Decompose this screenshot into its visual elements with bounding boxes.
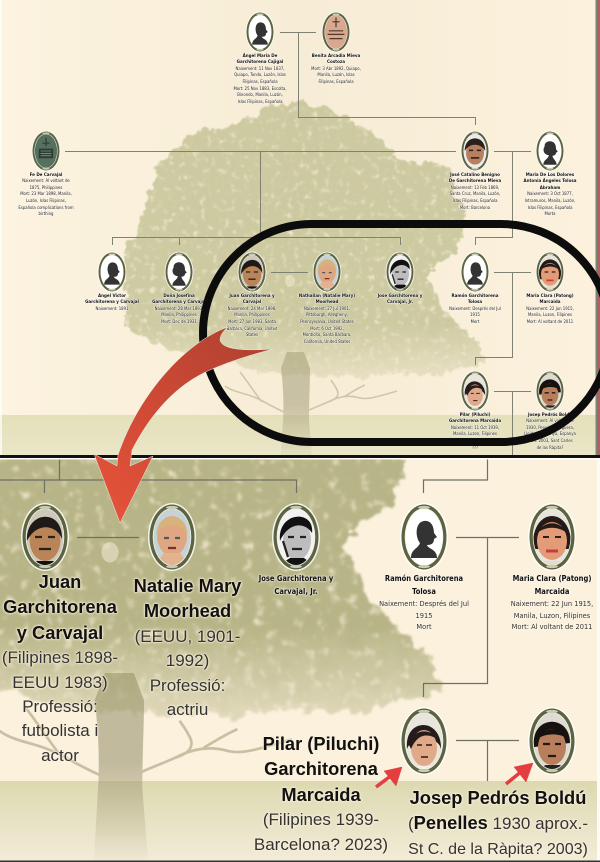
- text: Josep Pedrós Boldú: Josep Pedrós Boldú: [410, 787, 586, 808]
- text: Àngel Maria: Ángel Maria De: [243, 54, 277, 59]
- portrait: Maria Clara large: [528, 503, 576, 571]
- text: Ramón Garchitorena Tolosa: [379, 574, 469, 631]
- text: Nathalie small: Pittsburgh, Allegheny,: [306, 313, 348, 318]
- text: Juan small: Manila, Philippines: [234, 313, 270, 318]
- text: Josep Pedrós Boldú: [408, 787, 588, 858]
- text: José Catalino: De Garchitorena Mieva: [449, 179, 501, 184]
- text: Jose Jr small: Jose Garchitorena y: [378, 294, 422, 299]
- text: Ramón small: [449, 293, 501, 325]
- portrait: Juan small: [238, 252, 266, 292]
- portrait: Natalie Moorhead large: [148, 503, 196, 571]
- portrait: Pilar small: [461, 371, 489, 411]
- text: Maria Clara Marcaida: Maria Clara (Patong): [513, 574, 591, 583]
- text: Pilar Garchitorena Marcaida: Garchitorena: [264, 758, 378, 779]
- text: Josefina: [152, 292, 206, 325]
- text: Maria Clara Marcaida: Naixement: 22 Jun 1915,: [511, 599, 593, 608]
- text: Juan small: Barbara, California, United: [227, 327, 277, 332]
- text: Josep small: Naixement: Al voltant de: [526, 419, 574, 424]
- text: Pilar Garchitorena Marcaida: Pilar (Piluchi): [263, 733, 379, 754]
- text: Ramón small: Tolosa: [468, 300, 482, 305]
- text: Benita Arcadia: [311, 53, 361, 85]
- portrait: Jose Jr small: [386, 252, 414, 292]
- portrait: Fe seal: [32, 131, 60, 171]
- text: Josep small: de las Ràpita?: [537, 446, 563, 451]
- text: Nathalie small: Nathalian (Natalie Mary): [299, 294, 355, 299]
- text: Àngel Maria: Quiapo, Tondo, Luzón, Islas: [234, 73, 286, 78]
- portrait: Josep small: [536, 371, 564, 411]
- text: Juan small: Naixement: 24 Mar 1898,: [228, 307, 276, 312]
- text: Benita Arcadia: Filipinas, Española: [318, 80, 354, 85]
- family tree connector lines, bottom: [0, 459, 519, 781]
- text: Juan small: Mort: 27 Jun 1983, Santa: [228, 320, 276, 325]
- text: Fe De Carvajal: Fe De Carvajal: [30, 173, 62, 178]
- text: Maria De Los Dolores: [523, 172, 577, 217]
- text: José Catalino: Naixement: 13 Feb 1869,: [451, 186, 499, 191]
- text: Juan Garchitorena y Carvajal: Professió:: [22, 697, 98, 716]
- text: Josefina: Manila, Philippines: [161, 313, 197, 318]
- text: Nathalie small: Pennsylvania, United States: [300, 320, 354, 325]
- text: Nathalie small: Naixement: 27 Jul 1901,: [304, 307, 350, 312]
- portrait: José Catalino: [461, 131, 489, 171]
- text: Josep small: Lleida, Catalunya, Espanya: [524, 432, 576, 437]
- text: Nathalie small: Moorhead: [316, 300, 338, 305]
- text: Maria De Los Dolores: Naixement: 3 Oct 1877,: [527, 192, 573, 197]
- text: Fe De Carvajal: Española complications from: [18, 206, 74, 211]
- text: Angel Victor: [84, 293, 140, 312]
- text: Benita Arcadia: Benita Arcadia Mieva: [312, 54, 360, 59]
- portrait: Maria De Los Dolores: [536, 131, 564, 171]
- text: José Catalino: Islas Filipinas, Española: [453, 199, 497, 204]
- text: Fe De Carvajal: Luzón, Islas Filipinas,: [26, 199, 66, 204]
- text: Maria Clara small: Marcaida: [540, 300, 560, 305]
- text: Pilar small: ???: [472, 446, 478, 451]
- text: Jose Garchitorena y Carvajal Jr: [257, 574, 334, 597]
- text: Angel Victor: Naixement: 1891: [96, 307, 128, 312]
- text: Maria De Los Dolores: Abraham: [540, 186, 560, 191]
- text: Pilar small: Mort: [471, 439, 479, 444]
- text: Pilar Garchitorena Marcaida: (Filipines 1939-: [263, 810, 379, 829]
- text: Maria De Los Dolores: Islas Filipinas, Española: [528, 206, 572, 211]
- text: Fe De Carvajal: Mort: 23 Mar 1898, Manila,: [20, 192, 72, 197]
- text: Fe De Carvajal: Naixement: Al voltant de: [22, 179, 70, 184]
- text: Juan Garchitorena y Carvajal: EEUU 1983): [12, 673, 108, 692]
- text: Juan Garchitorena y Carvajal: Juan: [39, 571, 81, 592]
- text: Nathalie small: Monticito, Santa Barbara,: [303, 333, 351, 338]
- text: Ramón small: Naixement: Després del Jul: [449, 307, 501, 312]
- text: Pilar small: [448, 412, 502, 451]
- text: Maria Clara small: Mort: Al voltant de 2011: [527, 320, 573, 325]
- text: Fe De Carvajal: birthing: [39, 212, 53, 217]
- text: Ramón small: 1915: [470, 313, 480, 318]
- text: José Catalino: José Catalino Benigno: [450, 173, 500, 178]
- portrait: Pilar large: [400, 707, 448, 775]
- text: Jose Jr small: Carvajal, Jr.: [387, 300, 413, 305]
- text: Ramón Garchitorena Tolosa: Naixement: Després del Jul: [379, 599, 469, 608]
- text: Pilar small: Naixement: 11 Oct 1939,: [451, 426, 499, 431]
- text: Natalie Mary Moorhead: 1992): [166, 651, 209, 670]
- text: Natalie Mary Moorhead: actriu: [167, 700, 208, 719]
- text: Pilar Garchitorena Marcaida: Marcaida: [281, 784, 361, 805]
- text: Ramón small: Ramón Garchitorena: [452, 294, 498, 299]
- text: Natalie Mary Moorhead: (EEUU, 1901-: [135, 627, 240, 646]
- text: Natalie Mary Moorhead: Natalie Mary: [134, 575, 241, 596]
- text: Maria Clara small: [526, 293, 574, 325]
- text: Josep Pedrós Boldú: St C. de la Ràpita? 2003): [408, 841, 588, 858]
- text: Angel Victor: Garchitorena y Carvajal: [85, 300, 139, 305]
- text: Juan Garchitorena y Carvajal: (Filipines 1898-: [2, 648, 118, 667]
- text: Àngel Maria: Naixement: 11 Nov 1837,: [236, 67, 284, 72]
- text: Maria Clara small: Manila, Luzon, Filipines: [528, 313, 572, 318]
- text: Maria Clara Marcaida: Manila, Luzon, Filipines: [514, 610, 590, 620]
- text: Juan small: States: [246, 333, 258, 338]
- portrait: Àngel Maria: [246, 12, 274, 52]
- text: Josefina: Doña Josefina: [163, 294, 195, 299]
- text: Maria Clara small: Naixement: 22 Jun 1915,: [526, 307, 574, 312]
- text: José Catalino: Santa Cruz, Manila, Luzón,: [450, 192, 500, 197]
- text: Josefina: Naixement: 28 Mar 1893,: [155, 307, 203, 312]
- text: Josep Pedrós Boldú: (Penelles 1930 aprox.-: [408, 812, 588, 833]
- text: Juan small: Carvajal: [243, 300, 261, 305]
- text: Natalie Mary Moorhead: Moorhead: [144, 600, 231, 621]
- portrait: Angel Victor: [98, 252, 126, 292]
- text: Juan Garchitorena y Carvajal: [1, 571, 118, 765]
- text: Pilar small: Garchitorena Marcaida: [449, 419, 501, 424]
- text: Natalie Mary Moorhead: Professió:: [150, 676, 225, 695]
- portrait: Josep large: [528, 707, 576, 775]
- portrait: Jose Jr large: [272, 503, 320, 571]
- small red arrow: Josep: [506, 763, 533, 784]
- text: Juan small: [226, 292, 278, 338]
- bottom enlarged tree: [0, 459, 600, 860]
- overlay: highlight ring, arrows and divider: [0, 220, 600, 862]
- text: Ramón small: Mort: [471, 320, 479, 325]
- right edge strip: [0, 0, 600, 456]
- text: Josefina: Mort: Dec de 1931: [161, 320, 197, 325]
- text: Àngel Maria: Filipinas, Española: [242, 80, 278, 85]
- portrait: Maria Clara small: [536, 252, 564, 292]
- text: Nathalie small: [298, 292, 356, 345]
- text: Juan small: Juan Garchitorena y: [229, 294, 275, 299]
- text: Jose Garchitorena y Carvajal Jr: Jose Garchitorena y: [259, 574, 333, 583]
- text: Maria Clara Marcaida: Marcaida: [535, 586, 569, 596]
- family tree connector lines, top: [65, 32, 531, 456]
- text: Ramón Garchitorena Tolosa: Mort: [416, 622, 432, 631]
- panel divider: [0, 455, 600, 460]
- portrait: Nathalie small: [313, 252, 341, 292]
- small red arrow: Pilar: [376, 767, 402, 787]
- text: Pilar Garchitorena Marcaida: [254, 733, 388, 854]
- text: Ramón Garchitorena Tolosa: Tolosa: [412, 586, 436, 596]
- text: Àngel Maria: Binondo, Manila, Luzón,: [237, 93, 283, 98]
- text: Josep small: 1930, Penelles, Noguera,: [526, 426, 574, 431]
- top tree: [0, 100, 597, 470]
- text: Natalie Mary Moorhead: [132, 575, 242, 719]
- text: Juan Garchitorena y Carvajal: Garchitorena: [3, 596, 117, 617]
- text: José Catalino: Mort: Barcelona: [460, 206, 490, 211]
- bottom rule: [0, 860, 600, 862]
- text: Jose Jr small: [376, 292, 423, 305]
- text: Benita Arcadia: Costoza: [327, 60, 345, 65]
- text: Fe De Carvajal: [18, 172, 74, 217]
- text: Angel Victor: Angel Victor: [98, 294, 126, 299]
- text: Nathalie small: California, United States: [304, 340, 350, 345]
- text: Maria Clara Marcaida: Mort: Al voltant de 2011: [512, 622, 592, 631]
- text: Juan Garchitorena y Carvajal: y Carvajal: [17, 622, 103, 643]
- text: Josep small: Josep Pedrós Boldú: [528, 413, 572, 418]
- text: Maria Clara small: Maria Clara (Patong): [526, 294, 574, 299]
- portrait: Ramón small: [461, 252, 489, 292]
- text: Ramón Garchitorena Tolosa: Ramón Garchitorena: [385, 574, 463, 583]
- text: Pilar small: Manila, Luzon, Filipines: [453, 432, 497, 437]
- text: Maria De Los Dolores: Morta: [544, 212, 556, 217]
- text: Juan Garchitorena y Carvajal: futbolista i: [22, 721, 98, 740]
- portrait: Ramón large silhouette: [400, 503, 448, 571]
- portrait: Josefina: [165, 252, 193, 292]
- text: Àngel Maria: Garchitorena Cajigal: [237, 60, 283, 65]
- text: Nathalie small: Mort: 6 Oct 1992,: [310, 327, 344, 332]
- text: José Catalino: [448, 172, 502, 211]
- text: Benita Arcadia: Manila, Luzón, Islas: [317, 73, 355, 78]
- portrait: Benita Arcadia tombstone: [322, 12, 350, 52]
- text: Pilar small: Pilar (Piluchi): [460, 413, 490, 418]
- text: Ramón Garchitorena Tolosa: 1915: [416, 610, 432, 620]
- text: Josep small: [524, 412, 576, 451]
- text: Maria De Los Dolores: Intramuros, Manila, Luzón,: [525, 199, 575, 204]
- text: Josep small: Mort: 2003, Sant Carles: [527, 439, 573, 444]
- text: Jose Garchitorena y Carvajal Jr: Carvajal, Jr.: [274, 586, 318, 596]
- text: Maria De Los Dolores: Maria De Los Dolores: [526, 173, 574, 178]
- text: Josefina: Garchitorena y Carvajal: [152, 300, 206, 305]
- highlight ring: [203, 224, 600, 442]
- text: Pilar Garchitorena Marcaida: Barcelona? 2023): [254, 835, 388, 854]
- text: Àngel Maria: [233, 52, 287, 105]
- portrait: Juan Garchitorena large: [21, 503, 69, 571]
- text: Juan Garchitorena y Carvajal: actor: [41, 746, 79, 765]
- text: Maria De Los Dolores: Antonia Ángeles Tolosa: [523, 179, 576, 184]
- text: Àngel Maria: Mort: 25 Nov 1883, Escolta,: [233, 87, 287, 92]
- text: Àngel Maria: Islas Filipinas, Española: [238, 100, 282, 105]
- text: Benita Arcadia: Mort: 3 Abr 1892, Quiapo,: [311, 67, 361, 72]
- text: Maria Clara Marcaida: [511, 574, 593, 631]
- text: Fe De Carvajal: 1875, Philippines: [30, 186, 62, 191]
- big red curved arrow: [94, 327, 273, 523]
